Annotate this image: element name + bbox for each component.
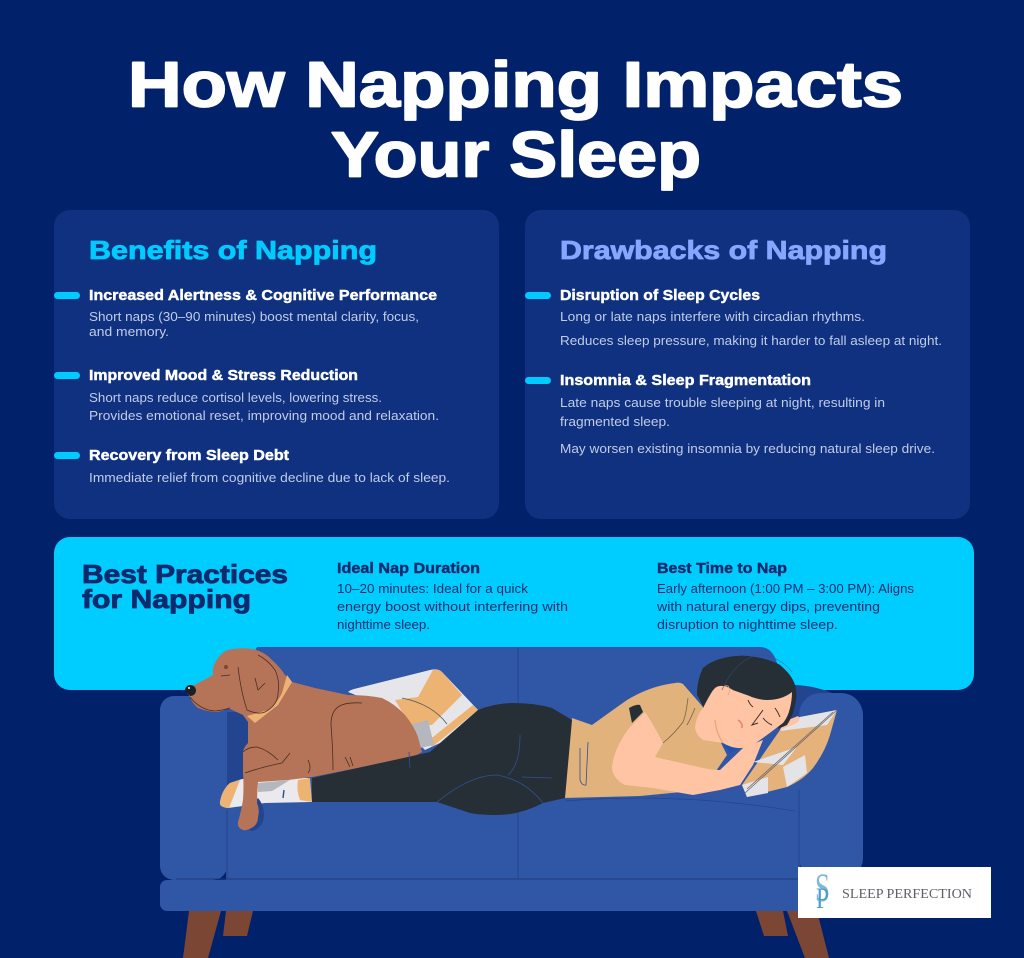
heading: best practices xyxy=(82,559,288,614)
benefit: alertness: Short naps (30–90 minutes) boost mental clarity, focus, xyxy=(89,309,419,324)
drawback: insomnia: fragmented sleep. xyxy=(560,414,670,429)
logo: sleep perfection: S xyxy=(815,865,830,910)
best time to nap: disruption to nighttime sleep. xyxy=(657,617,838,632)
benefit: sleep debt xyxy=(54,447,450,485)
illustration: person body xyxy=(312,683,763,815)
heading: best practices: for Napping xyxy=(82,584,251,614)
title xyxy=(128,48,903,190)
illustration: person's feet xyxy=(220,778,312,808)
illustration: left cushion xyxy=(348,669,478,750)
logo: sleep perfection: SLEEP PERFECTION xyxy=(842,887,972,902)
drawback: sleep cycles: Reduces sleep pressure, making it harder to fall asleep at night. xyxy=(560,333,942,348)
best time to nap: Early afternoon (1:00 PM – 3:00 PM): Aligns xyxy=(657,581,914,596)
panel: best practices xyxy=(54,537,974,690)
ideal nap duration: energy boost without interfering with xyxy=(337,599,568,614)
title: Your Sleep xyxy=(331,118,701,190)
logo: sleep perfection: P xyxy=(816,882,829,915)
best time to nap: with natural energy dips, preventing xyxy=(656,599,880,614)
drawback: insomnia xyxy=(525,372,935,456)
ideal nap duration xyxy=(337,560,568,632)
best time to nap: Best Time to Nap xyxy=(657,560,787,577)
drawback: insomnia: Late naps cause trouble sleeping at night, resulting in xyxy=(560,395,885,410)
illustration: right pillow xyxy=(742,710,837,797)
benefit: mood: Provides emotional reset, improving mood and relaxation. xyxy=(89,408,439,423)
illustration: dog xyxy=(185,648,422,831)
drawback: sleep cycles xyxy=(525,287,942,348)
benefit: mood xyxy=(54,367,439,423)
benefit: mood: Improved Mood & Stress Reduction xyxy=(89,367,358,384)
panel: drawbacks of napping xyxy=(525,210,970,519)
heading: benefits: Benefits of Napping xyxy=(89,235,377,265)
heading: drawbacks: Drawbacks of Napping xyxy=(560,235,887,265)
drawback: sleep cycles: Long or late naps interfere with circadian rhythms. xyxy=(560,309,865,324)
panel: benefits of napping xyxy=(54,210,499,519)
benefit: alertness: Increased Alertness & Cognitive Performance xyxy=(89,287,437,304)
benefit: alertness: and memory. xyxy=(89,324,169,339)
benefit: sleep debt: Recovery from Sleep Debt xyxy=(89,447,289,464)
drawback: sleep cycles: Disruption of Sleep Cycles xyxy=(560,287,760,304)
ideal nap duration: nighttime sleep. xyxy=(337,617,430,632)
title: How Napping Impacts xyxy=(128,48,903,120)
heading: best practices: Best Practices xyxy=(82,559,288,589)
illustration: person head and arm xyxy=(695,654,799,748)
drawback: insomnia: Insomnia & Sleep Fragmentation xyxy=(560,372,811,389)
benefit: sleep debt: Immediate relief from cognitive decline due to lack of sleep. xyxy=(89,470,450,485)
drawback: insomnia: May worsen existing insomnia by reducing natural sleep drive. xyxy=(560,441,935,456)
benefit: alertness xyxy=(54,287,437,339)
best time to nap xyxy=(656,560,914,632)
ideal nap duration: 10–20 minutes: Ideal for a quick xyxy=(337,581,529,596)
benefit: mood: Short naps reduce cortisol levels, lowering stress. xyxy=(89,390,382,405)
ideal nap duration: Ideal Nap Duration xyxy=(337,560,480,577)
logo: sleep perfection xyxy=(798,865,991,918)
illustration: sofa xyxy=(160,647,863,958)
